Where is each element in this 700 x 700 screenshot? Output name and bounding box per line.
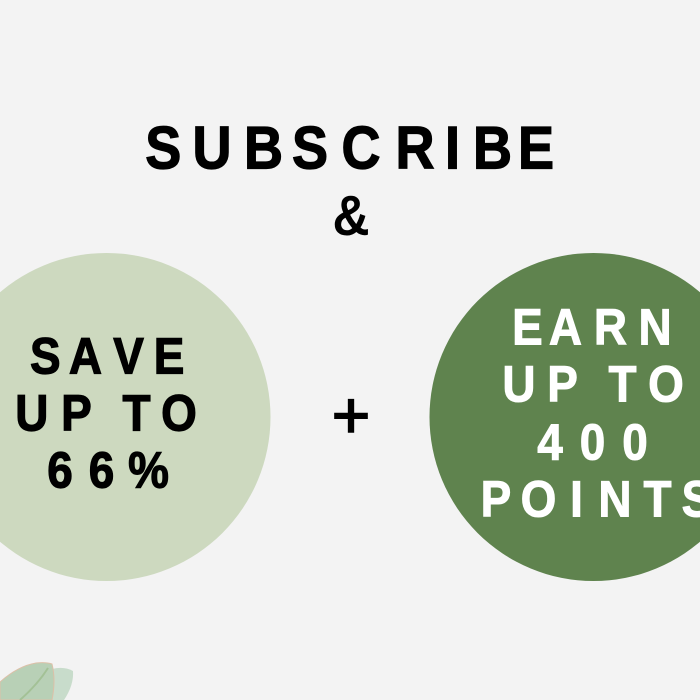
icon: plus: + — [332, 378, 370, 452]
text: earn up to 400 points: 400 — [537, 414, 648, 471]
panel: save circle — [0, 253, 270, 581]
panel: earn circle — [430, 253, 700, 581]
text: earn up to 400 points — [481, 299, 700, 528]
text: earn up to 400 points: UP TO — [502, 356, 684, 413]
text: save up to 66%: SAVE — [30, 328, 184, 385]
heading: ampersand: & — [332, 185, 370, 248]
text: save up to 66%: 66% — [47, 442, 169, 499]
title: subscribe: SUBSCRIBE — [145, 115, 554, 182]
text: save up to 66%: UP TO — [15, 385, 197, 442]
icon: eucalyptus leaves — [0, 663, 73, 700]
text: earn up to 400 points: EARN — [512, 299, 672, 356]
text: save up to 66% — [15, 328, 197, 499]
